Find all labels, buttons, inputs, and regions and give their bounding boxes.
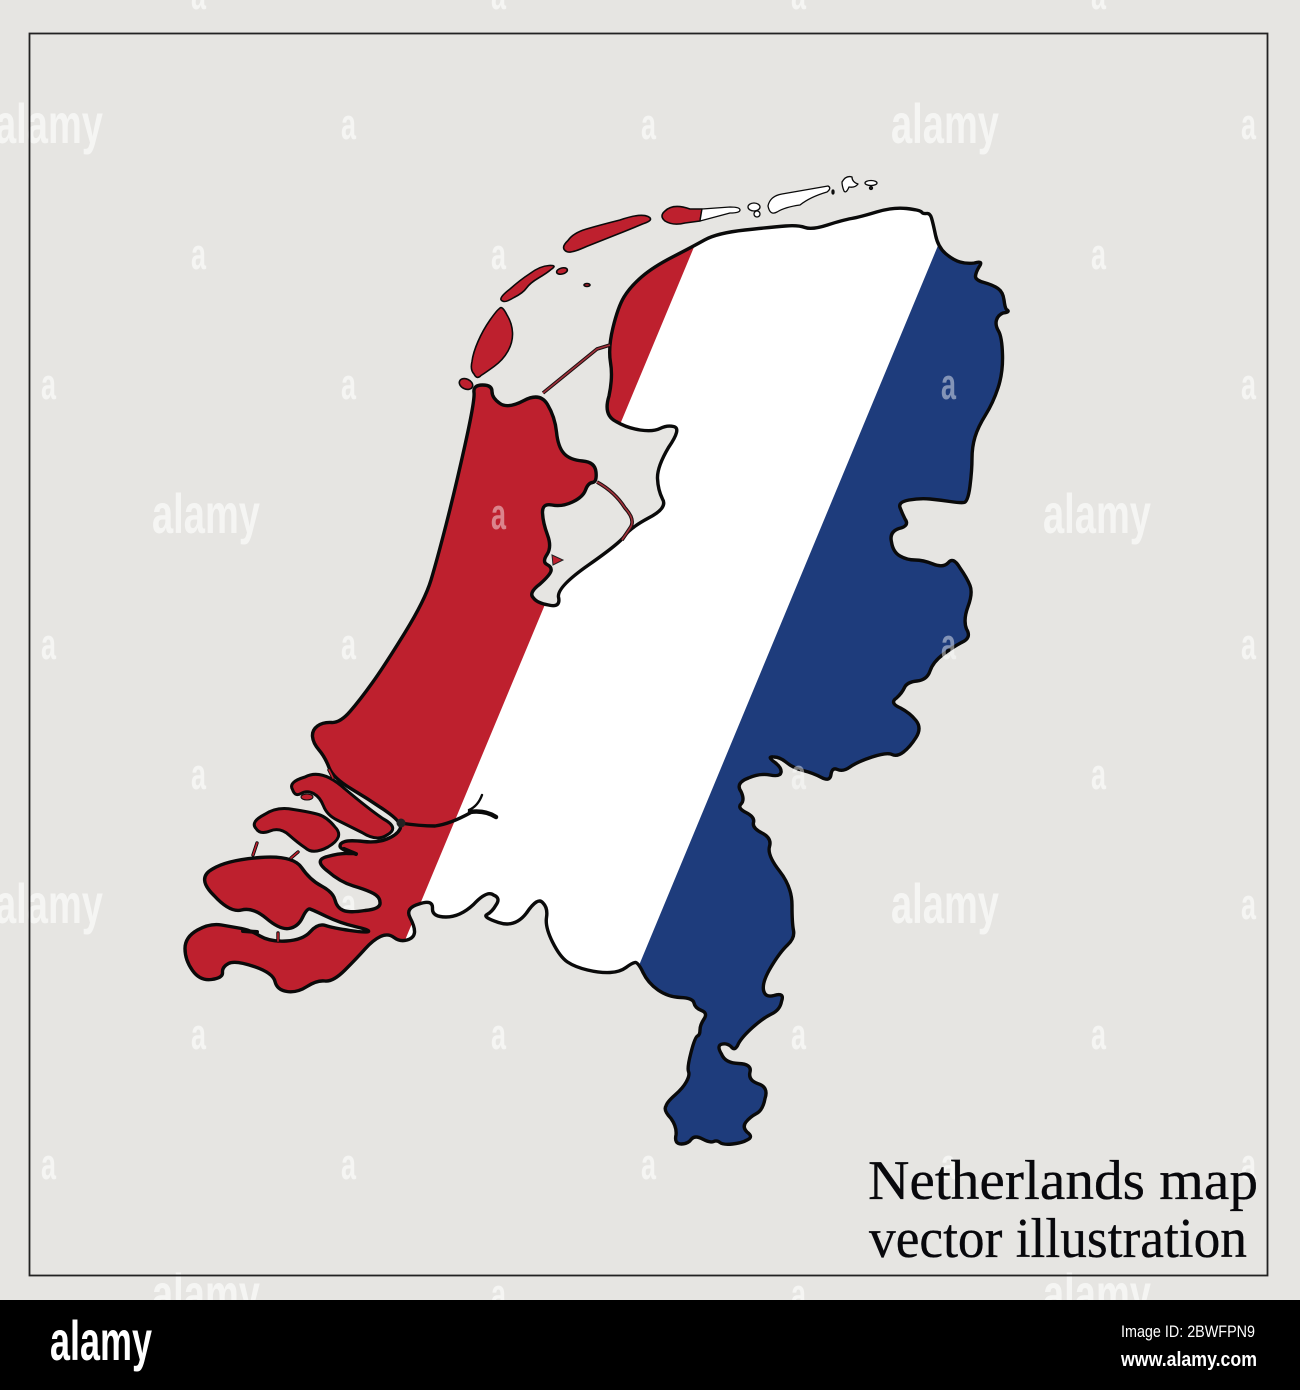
watermark pattern: a <box>1241 620 1256 669</box>
watermark pattern: a <box>341 880 356 929</box>
watermark pattern: a <box>491 1270 506 1319</box>
watermark pattern: a <box>1241 880 1256 929</box>
watermark pattern: a <box>41 360 56 409</box>
watermark pattern: alamy <box>1043 1262 1151 1325</box>
small red polder patch <box>552 555 563 565</box>
watermark letters over the map: a <box>941 360 956 409</box>
watermark pattern: a <box>1241 100 1256 149</box>
caption <box>868 1150 1258 1270</box>
watermark pattern: a <box>791 1010 806 1059</box>
watermark pattern: alamy <box>152 1262 260 1325</box>
mainland outline <box>185 208 1008 1144</box>
watermark pattern: a <box>791 1270 806 1319</box>
caption: Netherlands map <box>868 1150 1258 1212</box>
white Wadden islands <box>700 177 877 221</box>
watermark pattern: a <box>341 1140 356 1189</box>
watermark pattern: a <box>1241 1140 1256 1189</box>
watermark pattern: a <box>1091 750 1106 799</box>
watermark pattern: a <box>491 1010 506 1059</box>
watermark pattern: a <box>191 750 206 799</box>
watermark pattern: alamy <box>152 482 260 545</box>
watermark pattern: a <box>341 100 356 149</box>
mainland with flag stripes <box>183 206 1010 1146</box>
watermark pattern: a <box>191 230 206 279</box>
watermark pattern: a <box>41 620 56 669</box>
caption: vector illustration <box>869 1208 1247 1270</box>
blue stripe <box>640 246 1006 1143</box>
watermark pattern: alamy <box>891 92 999 155</box>
watermark letters over the map: a <box>491 490 506 539</box>
river and small dykes <box>243 770 496 941</box>
white stripe <box>406 210 938 971</box>
watermark letters over the map: a <box>791 750 806 799</box>
watermark pattern: a <box>1241 360 1256 409</box>
red Wadden islands <box>458 206 702 391</box>
watermark pattern: a <box>341 620 356 669</box>
Afsluitdijk and Houtribdijk <box>543 345 632 540</box>
watermark pattern: a <box>641 100 656 149</box>
watermark pattern: a <box>191 1010 206 1059</box>
watermark pattern: alamy <box>1043 482 1151 545</box>
watermark pattern: a <box>1091 1010 1106 1059</box>
watermark pattern: a <box>341 360 356 409</box>
watermark pattern: a <box>941 1140 956 1189</box>
watermark letters over the map: a <box>941 620 956 669</box>
bottom black band <box>0 1300 1300 1390</box>
South Holland delta islands <box>254 774 393 851</box>
band logo: alamy <box>50 1309 152 1372</box>
map of the Netherlands <box>183 176 1010 1146</box>
image ID: Image ID: 2BWFPN9 <box>1121 1322 1255 1341</box>
red stripe <box>186 248 694 990</box>
watermark pattern: alamy <box>891 872 999 935</box>
watermark letters over the map <box>491 360 956 799</box>
watermark pattern: a <box>491 230 506 279</box>
watermark pattern: a <box>1091 230 1106 279</box>
website: www.alamy.com <box>1120 1349 1257 1371</box>
watermark pattern: a <box>641 1140 656 1189</box>
watermark pattern: a <box>41 1140 56 1189</box>
